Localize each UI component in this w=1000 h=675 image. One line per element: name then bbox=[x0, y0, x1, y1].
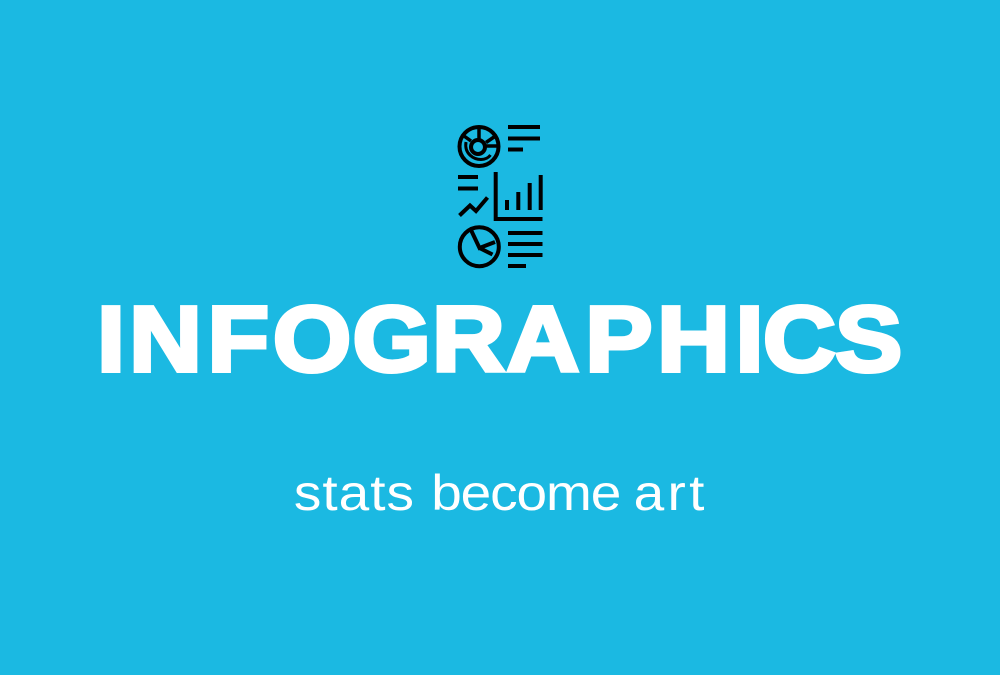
icon: top text lines bbox=[508, 127, 540, 150]
icon: bar chart bbox=[496, 172, 542, 219]
title: INFOGRAPHICS bbox=[97, 287, 902, 391]
icon: middle text lines bbox=[458, 177, 478, 188]
subtitle: art bbox=[634, 465, 708, 521]
subtitle: stats bbox=[294, 465, 415, 521]
icon: donut chart bbox=[460, 127, 498, 166]
icon: trend line bbox=[460, 198, 488, 216]
icon: pie chart bbox=[460, 227, 499, 266]
subtitle: become bbox=[431, 465, 620, 521]
icon: bottom text lines bbox=[508, 233, 542, 266]
icon: data charts bbox=[458, 127, 542, 266]
